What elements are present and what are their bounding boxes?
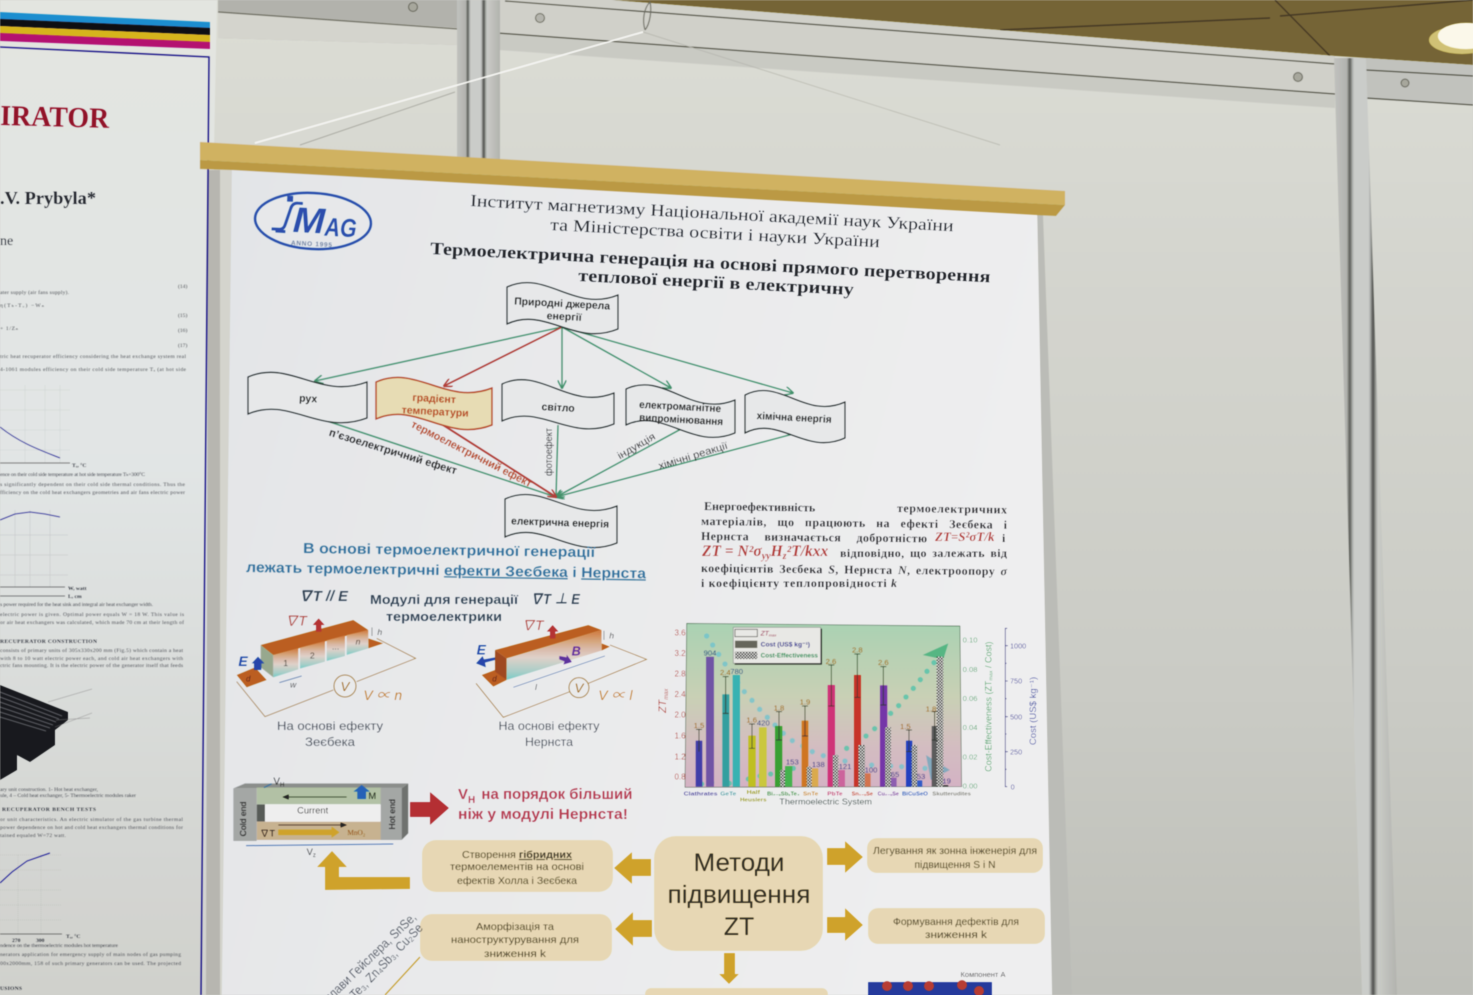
node: electric energy: електрична енергія [511, 515, 609, 531]
module diagram: Seebeck [237, 612, 416, 717]
box: doping: підвищення S і N [914, 859, 996, 871]
right axis: cost-effectiveness: 0.02 [963, 752, 978, 761]
paragraph: energy efficiency: відповідно, що залежать від [840, 546, 1007, 560]
cold end: Cold end [238, 801, 248, 836]
red note: на порядок більший [477, 786, 632, 803]
edge label: chemical reactions: хімічні реакції [657, 440, 729, 472]
paragraph: energy efficiency: термоелектричних [897, 501, 1007, 517]
contact pads [237, 638, 383, 687]
flowchart: energy sources [248, 283, 845, 548]
x axis title: Thermoelectric System [779, 797, 872, 807]
background: aluminium posts [457, 0, 1397, 995]
box: hybrid elements: Створення гібридних [462, 849, 572, 861]
ZT value labels: 2.6 [878, 658, 889, 667]
V_H label: V [273, 776, 280, 787]
arrow: down [719, 953, 739, 984]
left axis: 0.8 [674, 772, 686, 781]
arrow: chemical to electricity [556, 434, 793, 497]
red note: ніж у модулі Нернста! [458, 806, 628, 823]
box: methods of ZT increase: підвищення [668, 881, 810, 909]
x axis labels: GeTe [720, 791, 736, 797]
cold end [233, 788, 257, 841]
voltage proportional label: V ∝ n [363, 687, 402, 703]
logo: IMAG: AG [323, 212, 357, 243]
node: temperature gradient [376, 377, 492, 430]
ZT value labels: 2.8 [852, 646, 863, 655]
node: natural sources: енергії [546, 310, 583, 324]
small text lines: η(Tₕ-Tₒ) −Wₙ [0, 302, 45, 309]
box: hybrid elements: термоелементів на основі [450, 861, 584, 873]
header: institute name [470, 191, 954, 251]
line chart 3: Tₓ, °C [66, 933, 80, 940]
node: chemical energy [745, 390, 845, 443]
left axis: 1.6 [674, 731, 686, 740]
left axis: 2.0 [674, 711, 686, 720]
gradient T label and arrow: ∇T [521, 617, 545, 633]
main title: Термоелектрична генерація на основі прямого перетворення [430, 238, 991, 286]
right axis: cost-effectiveness: max [989, 670, 995, 681]
cost value labels: 53 [917, 772, 925, 781]
box: defects: Формування дефектів для [893, 916, 1019, 928]
legend [733, 627, 822, 665]
dimension labels: h [609, 630, 614, 640]
small text lines: ater supply (air fans supply). [0, 289, 70, 296]
right axis: cost-effectiveness: 0.00 [963, 782, 978, 791]
E label and arrow: E [477, 642, 487, 658]
line chart 2: W, watt [68, 586, 87, 592]
small text lines: + 1/Zₙ [0, 326, 19, 332]
node: electric energy [505, 494, 617, 548]
left neighbouring poster [0, 0, 232, 995]
small text lines: ule, 4 – Cold heat exchanger, 5- Thermoelectric modules raker [0, 793, 136, 799]
wooden hanging bar [200, 142, 1065, 216]
x axis labels: Sn₁₋ₓSe [852, 791, 873, 797]
legend: Cost (US$ kg⁻¹) [761, 642, 810, 649]
line chart 3: 270 [12, 938, 21, 944]
wire circuit [237, 638, 416, 717]
ZT value labels: 2.6 [826, 657, 836, 666]
E label and arrow: E [238, 653, 248, 669]
dimension labels: h [377, 627, 382, 637]
dimension labels: w [290, 679, 297, 689]
logo: IMAG [254, 190, 372, 252]
V_z arrow and label [246, 844, 393, 859]
line chart 1 [0, 385, 86, 469]
small text lines: tric heat recuperator efficiency considering the heat exchange system real [0, 353, 186, 360]
box: methods of ZT increase: Методи [694, 849, 784, 877]
x axis labels: BiCuSeO [902, 791, 928, 797]
paragraph: energy efficiency: і [1002, 531, 1006, 545]
paragraph: energy efficiency: матеріалів, що працюють на ефекті Зеєбека і [701, 514, 1008, 532]
section heading: thermoelectric effects: В основі термоелектричної генерації [303, 541, 596, 561]
right axis: cost-effectiveness: 0.08 [963, 665, 978, 674]
arrow: light to electricity [556, 425, 558, 497]
paragraph: energy efficiency: Нернста визначається добротністю [701, 529, 927, 545]
small text lines: 4-1061 modules efficiency on their cold side temperature Tₓ (at hot side [0, 366, 187, 373]
left axis: 2.4 [674, 690, 686, 699]
edge label: photoeffect: фотоефект [543, 428, 555, 476]
x axis labels: Bi₂₋ₓSbₓTe₃ [767, 791, 800, 797]
arrow: L-shaped to hybrid module [317, 851, 410, 890]
gradient T label and arrow [521, 617, 559, 638]
edge label: thermoelectric: термоелектричний ефект [409, 419, 534, 490]
line chart 1: Tₓ, °C [72, 462, 86, 469]
box: amorphization: зниження k [484, 948, 547, 960]
caption: Seebeck module: Зеєбека [305, 735, 355, 749]
paragraph: energy efficiency: yy [761, 551, 771, 562]
B label and arrow [559, 644, 581, 665]
arrow: source to light [561, 327, 563, 388]
legend: max [769, 633, 777, 638]
paragraph: energy efficiency: ²T/kxx [787, 543, 828, 560]
dimension labels [246, 627, 382, 689]
thermoelectric blocks: 2 [310, 651, 315, 661]
header: institute name: та Міністерства освіти і науки України [550, 215, 880, 251]
line chart 2: L, cm [68, 594, 82, 600]
affiliation fragment: ne [0, 234, 13, 249]
bars [696, 657, 948, 787]
caption: Nernst module: На основі ефекту [498, 719, 600, 733]
small text lines: ence on their cold side temperature at hot side temperature Tₕ=300°C [0, 471, 145, 478]
legend: Cost-Effectiveness [761, 653, 818, 660]
small text lines: or unit characteristics. An electric simulator of the gas turbine thermal [0, 816, 183, 823]
arrow: radiation to electricity [556, 429, 681, 497]
title fragment: IRATOR [0, 100, 111, 135]
arrow: source to radiation [562, 327, 671, 388]
oxide layer [257, 822, 382, 840]
module diagram: Nernst [476, 617, 647, 717]
left axis [657, 628, 686, 781]
x axis labels: Clathrates [684, 791, 718, 797]
box: doping [867, 838, 1043, 873]
cost value labels: 153 [786, 758, 799, 767]
paragraph: energy efficiency [701, 499, 1008, 590]
right axis: cost: 0 [1011, 782, 1015, 791]
box: amorphization: Аморфізація та [476, 921, 554, 933]
modules heading: ∇T ⊥ E [530, 591, 581, 608]
right axis: cost: 250 [1010, 747, 1022, 756]
x axis labels: Half [747, 790, 760, 796]
blue border line [0, 47, 209, 995]
paragraph: energy efficiency: z [782, 551, 787, 562]
cost value labels [704, 649, 951, 785]
green layer [257, 788, 382, 804]
logo: IMAG: ANNO 1995 [291, 240, 333, 249]
node: electromagnetic radiation: електромагнітне [639, 399, 722, 415]
right axis: cost-effectiveness: 0.06 [963, 694, 978, 703]
B label and arrow: B [572, 644, 581, 658]
small text lines: with 8 to 10 watt electric power each, and cold air heat exchangers with [0, 656, 183, 662]
box: defects: зниження k [925, 929, 988, 941]
right axis: cost-effectiveness [963, 636, 995, 791]
small text lines [0, 283, 187, 992]
ZT value labels: 1.5 [694, 721, 704, 730]
node: electromagnetic radiation: випромінювання [639, 412, 723, 428]
E label and arrow [476, 642, 495, 667]
box: methods of ZT increase [654, 836, 823, 951]
hanging string [255, 2, 1000, 145]
small text lines: nerators application for emergency supply of main nodes of gas pumping [0, 951, 181, 958]
x axis labels: PbTe [827, 791, 843, 797]
arrow: thermoelectric to electricity [443, 425, 556, 497]
header: institute name: Інститут магнетизму Національної академії наук України [470, 191, 954, 235]
x axis labels [684, 790, 971, 804]
box: amorphization [420, 914, 612, 961]
caption: Nernst module [498, 719, 600, 749]
left axis: 2.8 [674, 670, 686, 679]
background: ceiling and lamp [610, 0, 1473, 65]
modules heading: термоелектрики [386, 610, 502, 624]
colour bars [0, 12, 210, 49]
section heading: thermoelectric effects [246, 541, 647, 582]
plot background [685, 623, 962, 787]
hot end: Hot end [387, 799, 397, 829]
paragraph: energy efficiency: і коефіцієнту теплопровідності k [701, 576, 897, 590]
caption: Seebeck module: На основі ефекту [277, 719, 383, 733]
authors fragment: .V. Prybyla* [0, 188, 96, 208]
ZT value labels: 1.8 [926, 705, 936, 714]
cost value labels: 100 [865, 765, 877, 774]
small text lines: tained equaled W=72 watt. [0, 833, 67, 839]
node: motion: рух [299, 393, 318, 405]
cost value labels: 19 [942, 776, 951, 785]
voltmeter [569, 678, 589, 698]
gradient T label and arrow [260, 827, 339, 838]
box: defects [868, 908, 1045, 944]
ZT value labels [694, 646, 936, 731]
small text lines: USIONS [0, 986, 22, 992]
dimension labels [492, 630, 614, 692]
composite material diagram [868, 970, 1005, 995]
arrow: source to motion [315, 327, 562, 381]
composite material diagram: Компонент А [961, 970, 1005, 979]
thermoelectric blocks: ... [332, 641, 339, 651]
cost value labels: 65 [891, 770, 899, 779]
ZT value labels: 1.8 [774, 704, 784, 713]
node: chemical energy: хімічна енергія [756, 410, 832, 426]
small text lines: or air heat exchangers was calculated, which made 70 cm at their length of [0, 619, 184, 626]
node: natural sources: Природні джерела [514, 296, 611, 313]
dimension labels: d [246, 675, 251, 684]
gradient T label and arrow [284, 612, 325, 632]
line chart 2 [0, 510, 87, 600]
voltage proportional label: V ∝ l [598, 687, 633, 703]
background: top wall frame [218, 0, 1473, 108]
voltmeter [334, 675, 356, 697]
V_z arrow and label: V [307, 847, 313, 857]
right axis: cost: Cost (US$ kg⁻¹) [1028, 677, 1038, 745]
modules heading: ∇T // E [298, 588, 349, 605]
arrow: source to chemical [562, 327, 793, 393]
arrow: to amorphization [615, 912, 652, 946]
ZT value labels: 1.5 [900, 722, 911, 731]
node: light [502, 380, 614, 429]
modules heading [298, 588, 581, 624]
contact pads [482, 643, 610, 687]
arrow: to hybrid [614, 852, 651, 884]
heat exchanger drawing [0, 685, 92, 780]
main poster sheet [222, 163, 1052, 995]
line chart 3 [0, 853, 80, 944]
E label and arrow [238, 653, 264, 670]
V_z arrow and label: z [313, 853, 316, 859]
shadow of main poster on the wall [1037, 215, 1072, 995]
thermoelectric blocks [261, 620, 368, 677]
right axis: cost-effectiveness: / Cost) [983, 642, 993, 671]
ZT value labels: 1.6 [746, 715, 757, 724]
edge label: piezoelectric: п’єзоелектричний ефект [328, 427, 459, 477]
box: hybrid elements: ефектів Холла і Зеєбека [457, 875, 577, 887]
paragraph: energy efficiency: Енергоефективність [704, 499, 816, 515]
thermoelectric blocks: n [356, 637, 361, 647]
small text lines: (14) [178, 283, 187, 290]
V_H label [264, 776, 284, 788]
right axis: cost: 500 [1010, 712, 1022, 721]
arrow: to doping [827, 841, 863, 873]
trend arrow heads [923, 643, 950, 780]
node: temperature gradient: температури [401, 404, 469, 420]
left axis: max [664, 687, 670, 700]
paragraph: energy efficiency: H [770, 543, 784, 560]
left axis: ZT [657, 700, 669, 713]
current arrows [278, 795, 347, 827]
arrow: motion to electricity [315, 417, 556, 497]
legend: ZT [761, 630, 769, 637]
line chart 3: 300 [36, 938, 45, 944]
small text lines: s significantly dependent on their cold side thermal conditions. Thus the [0, 481, 186, 488]
main title [430, 238, 991, 299]
left axis: 3.6 [674, 628, 686, 637]
arrow: to red note [410, 792, 449, 825]
thermoelectric bar [495, 625, 602, 680]
right axis: cost-effectiveness: 0.10 [963, 636, 978, 645]
node: motion [248, 372, 367, 423]
cost-effectiveness dots [704, 633, 928, 771]
small text lines: (17) [178, 342, 187, 349]
paragraph: energy efficiency: ZT = N²σ [702, 543, 762, 560]
cost value labels: 121 [839, 762, 851, 771]
red note: H [468, 795, 475, 806]
node: temperature gradient: градієнт [412, 392, 456, 406]
connector line from amorphization [385, 957, 420, 995]
section heading: thermoelectric effects: лежать термоелектричні ефекти Зеєбека і Нернста [246, 560, 647, 582]
thermoelectric blocks: 1 [283, 658, 288, 668]
main title: теплової енергії в електричну [578, 265, 855, 299]
cost value labels: 420 [757, 719, 770, 728]
small text lines: ary unit construction. 1- Hot heat exchanger, [0, 787, 99, 793]
V_H label: H [280, 782, 284, 788]
small text lines: electric power is given. Optimal power equals W = 18 W. This value is [0, 612, 184, 618]
small text lines: s power required for the heat sink and integral air heat exchanger width. [0, 601, 154, 608]
right axis: cost [1005, 628, 1038, 791]
cost value labels: 138 [812, 760, 825, 769]
box: methods of ZT increase: ZT [724, 913, 754, 941]
node: natural sources [507, 283, 618, 334]
red note: V [458, 786, 468, 803]
box: doping: Легування як зонна інженерія для [873, 845, 1037, 857]
x axis labels: Skutterudites [932, 791, 971, 797]
error bars [696, 654, 938, 752]
small text lines: RECUPERATOR CONSTRUCTION [0, 639, 97, 645]
top surface [233, 783, 408, 788]
paragraph: energy efficiency: ZT=S²σT/k [934, 529, 995, 544]
caption: Nernst module: Нернста [525, 735, 573, 749]
small text lines: power dependence on hot and cold heat exchangers thermal conditions for [0, 824, 183, 831]
right axis: cost-effectiveness: 0.04 [963, 723, 978, 732]
M arrow and label: M [368, 791, 376, 801]
small text lines: (16) [178, 327, 187, 334]
small text lines: RECUPERATOR BENCH TESTS [2, 807, 96, 813]
current channel [257, 804, 382, 822]
small text lines: fficiency on the cold heat exchangers geometries and air fans electric power [0, 489, 185, 496]
right axis: cost: 1000 [1010, 641, 1026, 650]
cost value labels: 780 [730, 667, 743, 676]
small text lines: ctric fans mounting. It is the electric power of the generator itself that feeds [0, 662, 183, 669]
voltmeter: V [341, 679, 351, 694]
arrow: to defects [827, 908, 863, 941]
left axis: 3.2 [674, 649, 686, 658]
ZT value labels: 2.4 [720, 668, 731, 677]
gradient T label and arrow: ∇T [284, 612, 308, 628]
MnO2 label: MnO₂ [347, 828, 366, 837]
right axis: cost-effectiveness: Cost-Effectiveness (ZT [983, 681, 993, 772]
right axis: cost: 750 [1010, 677, 1022, 686]
cost value labels: 904 [704, 649, 717, 658]
wire circuit [476, 645, 647, 717]
x axis labels: Cu₂₋ₓSe [878, 791, 899, 797]
small text lines: consists of primary units of 305x330x200 mm (Fig.5) which contain a heat [0, 647, 183, 654]
small text lines: (15) [178, 312, 187, 319]
x axis labels: SnTe [803, 791, 818, 797]
logo: IMAG: M [292, 199, 327, 242]
edge label: induction: індукція [615, 431, 658, 462]
small text lines: ndence on the thermoelectric modules hot temperature [0, 943, 119, 949]
hybrid module diagram [233, 776, 408, 859]
box: bottom partial [645, 988, 828, 995]
dimension labels: l [535, 682, 538, 692]
current label: Current [297, 806, 329, 816]
red note [458, 786, 632, 823]
gradient T label and arrow: ∇T [260, 828, 275, 838]
dimension labels: d [492, 675, 497, 684]
M arrow and label [353, 785, 376, 801]
voltmeter: V [575, 681, 585, 696]
x axis labels: Heuslers [740, 798, 767, 804]
paragraph: energy efficiency: коефіцієнтів Зеєбека S, Нернста N, електроопору σ [701, 561, 1008, 578]
node: light: світло [541, 401, 575, 415]
box: hybrid elements [422, 840, 613, 892]
arrow: source to temperature gradient [444, 327, 562, 386]
bar chart: thermoelectric systems [657, 623, 1038, 807]
box: amorphization: наноструктурування для [451, 934, 579, 946]
node: electromagnetic radiation [626, 385, 735, 437]
caption: Seebeck module [277, 719, 383, 749]
ZT value labels: 1.9 [800, 698, 810, 707]
left axis: 1.2 [674, 752, 686, 761]
hot end [381, 783, 408, 840]
modules heading: Модулі для генерації [370, 593, 519, 607]
small text lines: 00x2000mm, 158 of such primary generators can be used. The projected [0, 960, 181, 967]
